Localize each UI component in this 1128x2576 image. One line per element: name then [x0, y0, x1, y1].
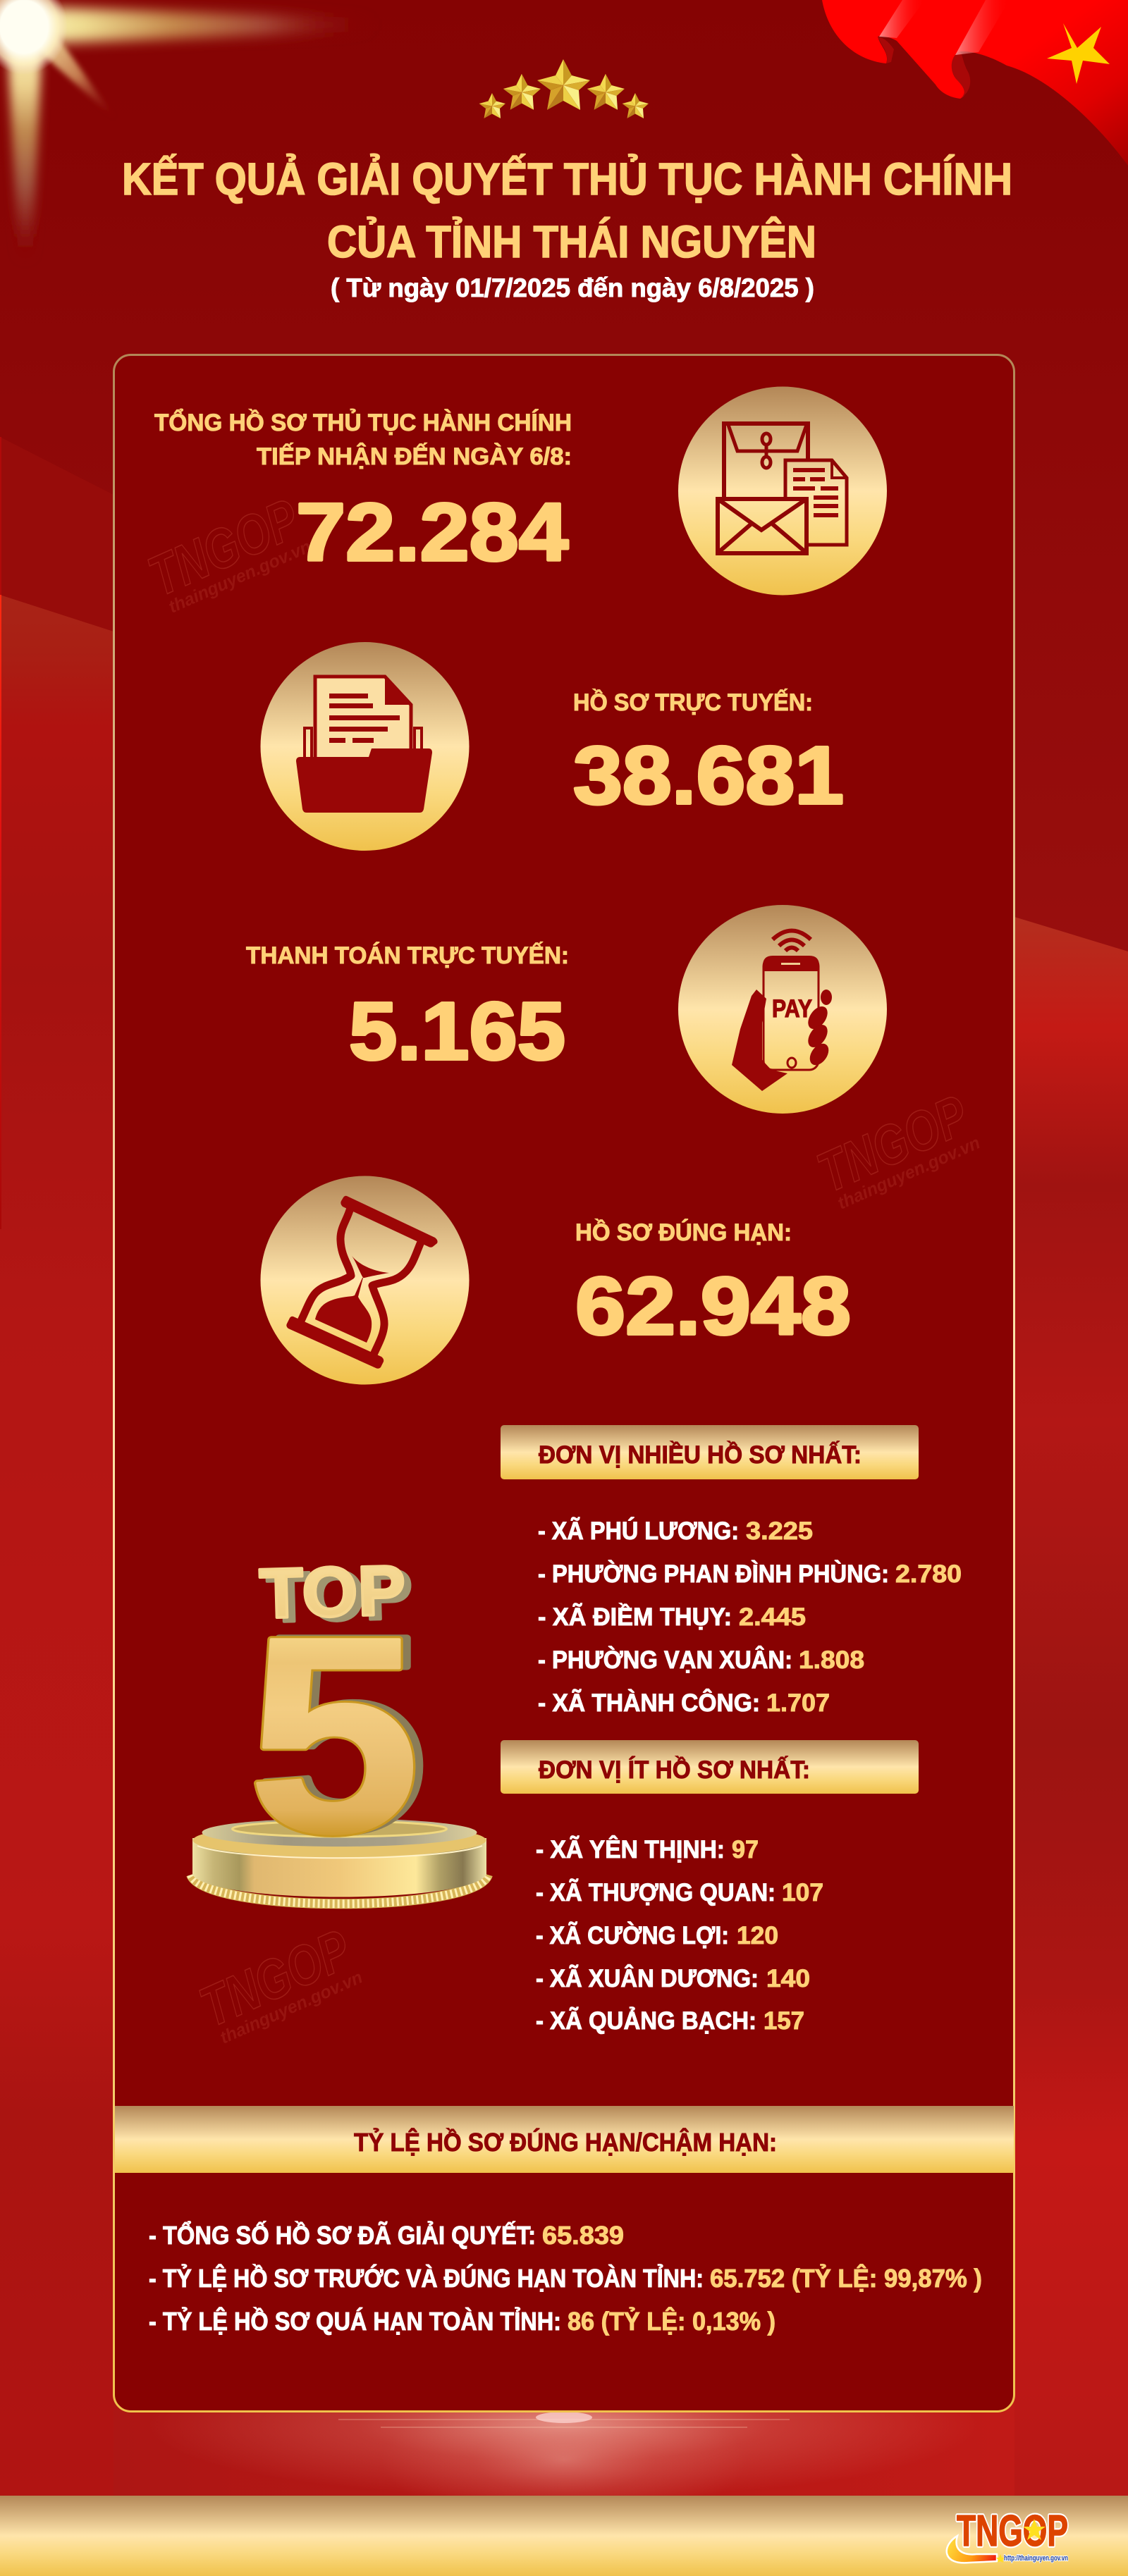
- icon: folder with document: [261, 642, 470, 851]
- list: fewest dossiers: [536, 1835, 823, 2035]
- stat: total dossiers: TIẾP NHẬN ĐẾN NGÀY 6/8:: [257, 443, 572, 470]
- light flare top left: [0, 0, 374, 261]
- stat: on-time dossiers: [575, 1219, 851, 1352]
- list: fewest dossiers: 107: [782, 1879, 823, 1906]
- banner: fewest dossiers: [501, 1740, 919, 1794]
- title: KẾT QUẢ GIẢI QUYẾT THỦ TỤC HÀNH CHÍNH: [122, 153, 1012, 204]
- watermark: thainguyen.gov.vn: [835, 1133, 983, 1214]
- stat: online dossiers: HỒ SƠ TRỰC TUYẾN:: [573, 689, 813, 716]
- watermark: thainguyen.gov.vn: [166, 536, 314, 617]
- stat: total dossiers: [154, 409, 572, 578]
- icon: five gold stars: [479, 59, 649, 118]
- text block: on-time rate details: - TỔNG SỐ HỒ SƠ ĐÃ GIẢI QUYẾT:: [149, 2219, 536, 2250]
- list: most dossiers: 3.225: [746, 1517, 813, 1545]
- large 5: 5: [248, 1579, 420, 1890]
- watermark: TNGOP: [191, 1918, 360, 2039]
- icon: phone payment: PAY: [772, 995, 812, 1023]
- list: most dossiers: - PHƯỜNG VẠN XUÂN:: [538, 1646, 792, 1674]
- watermark: TNGOP: [140, 487, 308, 608]
- list: most dossiers: - XÃ ĐIỀM THỤY:: [538, 1603, 732, 1631]
- illustration: gold top 5 trophy: [191, 1551, 488, 1904]
- list: fewest dossiers: 97: [732, 1836, 759, 1863]
- list: fewest dossiers: - XÃ THƯỢNG QUAN:: [536, 1879, 776, 1906]
- icon: flag star: [1047, 23, 1110, 84]
- icon: hourglass: [261, 1176, 470, 1384]
- list: fewest dossiers: 140: [766, 1965, 810, 1992]
- list: most dossiers: [538, 1517, 962, 1717]
- large 5: 5: [248, 1579, 420, 1890]
- stat: online payment: [246, 942, 569, 1077]
- banner: on-time rate: TỶ LỆ HỒ SƠ ĐÚNG HẠN/CHẬM HẠN:: [354, 2127, 777, 2157]
- list: fewest dossiers: - XÃ QUẢNG BẠCH:: [536, 2007, 756, 2035]
- stat: online payment: THANH TOÁN TRỰC TUYẾN:: [246, 942, 569, 969]
- title: CỦA TỈNH THÁI NGUYÊN: [327, 216, 816, 267]
- text block: on-time rate details: - TỶ LỆ HỒ SƠ TRƯỚC VÀ ĐÚNG HẠN TOÀN TỈNH:: [149, 2263, 704, 2293]
- banner: most dossiers: [501, 1425, 919, 1479]
- watermark: [191, 1917, 365, 2050]
- panel: main card: [114, 355, 1014, 2412]
- watermark: [140, 486, 314, 619]
- icon: phone payment: [678, 905, 887, 1114]
- banner: on-time rate: [115, 2106, 1014, 2173]
- logo: TNGOP: http://thainguyen.gov.vn: [1004, 2554, 1068, 2563]
- stat: online payment: 5.165: [349, 985, 565, 1077]
- list: fewest dossiers: - XÃ XUÂN DƯƠNG:: [536, 1964, 759, 1992]
- list: most dossiers: 1.808: [799, 1646, 864, 1674]
- stat: online dossiers: 38.681: [573, 729, 844, 821]
- TOP label: TOP: [266, 1555, 414, 1637]
- list: fewest dossiers: 157: [764, 2007, 804, 2035]
- title: [122, 153, 1012, 267]
- text block: on-time rate details: - TỶ LỆ HỒ SƠ QUÁ HẠN TOÀN TỈNH:: [149, 2306, 561, 2336]
- list: most dossiers: - XÃ PHÚ LƯƠNG:: [538, 1517, 739, 1545]
- stat: on-time dossiers: 62.948: [575, 1260, 851, 1352]
- list: fewest dossiers: - XÃ CƯỜNG LỢI:: [536, 1921, 729, 1949]
- flag top right: [822, 0, 1128, 166]
- watermark: [809, 1083, 983, 1215]
- list: most dossiers: 1.707: [766, 1689, 830, 1717]
- pedestal: [191, 1818, 488, 1904]
- stat: online dossiers: [573, 689, 844, 821]
- logo: TNGOP: TNGOP: [957, 2507, 1068, 2556]
- list: most dossiers: 2.445: [739, 1603, 806, 1631]
- watermark: thainguyen.gov.vn: [217, 1967, 365, 2048]
- TOP label: TOP: [259, 1551, 407, 1634]
- banner: most dossiers: ĐƠN VỊ NHIỀU HỒ SƠ NHẤT:: [539, 1441, 862, 1469]
- list: fewest dossiers: 120: [737, 1922, 778, 1949]
- list: most dossiers: 2.780: [895, 1560, 962, 1588]
- list: most dossiers: - XÃ THÀNH CÔNG:: [538, 1689, 760, 1717]
- text block: on-time rate details: 65.839: [542, 2221, 624, 2250]
- stat: total dossiers: TỔNG HỒ SƠ THỦ TỤC HÀNH CHÍNH: [154, 409, 572, 436]
- list: fewest dossiers: - XÃ YÊN THỊNH:: [536, 1835, 725, 1863]
- footer band: [0, 2496, 1128, 2576]
- stat: on-time dossiers: HỒ SƠ ĐÚNG HẠN:: [575, 1219, 792, 1246]
- text block: on-time rate details: 86 (TỶ LỆ: 0,13% ): [568, 2306, 776, 2336]
- banner: fewest dossiers: ĐƠN VỊ ÍT HỒ SƠ NHẤT:: [539, 1756, 810, 1784]
- logo: TNGOP: TNGOP: [957, 2507, 1068, 2556]
- large 5: 5: [256, 1577, 428, 1889]
- watermark: TNGOP: [809, 1083, 977, 1204]
- subtitle date range: ( Từ ngày 01/7/2025 đến ngày 6/8/2025 ): [331, 273, 814, 302]
- logo: TNGOP: [947, 2507, 1068, 2563]
- stat: total dossiers: 72.284: [296, 486, 568, 578]
- list: most dossiers: - PHƯỜNG PHAN ĐÌNH PHÙNG:: [538, 1560, 889, 1588]
- text block: on-time rate details: 65.752 (TỶ LỆ: 99,87% ): [710, 2263, 982, 2293]
- text block: on-time rate details: [149, 2219, 982, 2336]
- icon: envelopes and document: [678, 386, 887, 595]
